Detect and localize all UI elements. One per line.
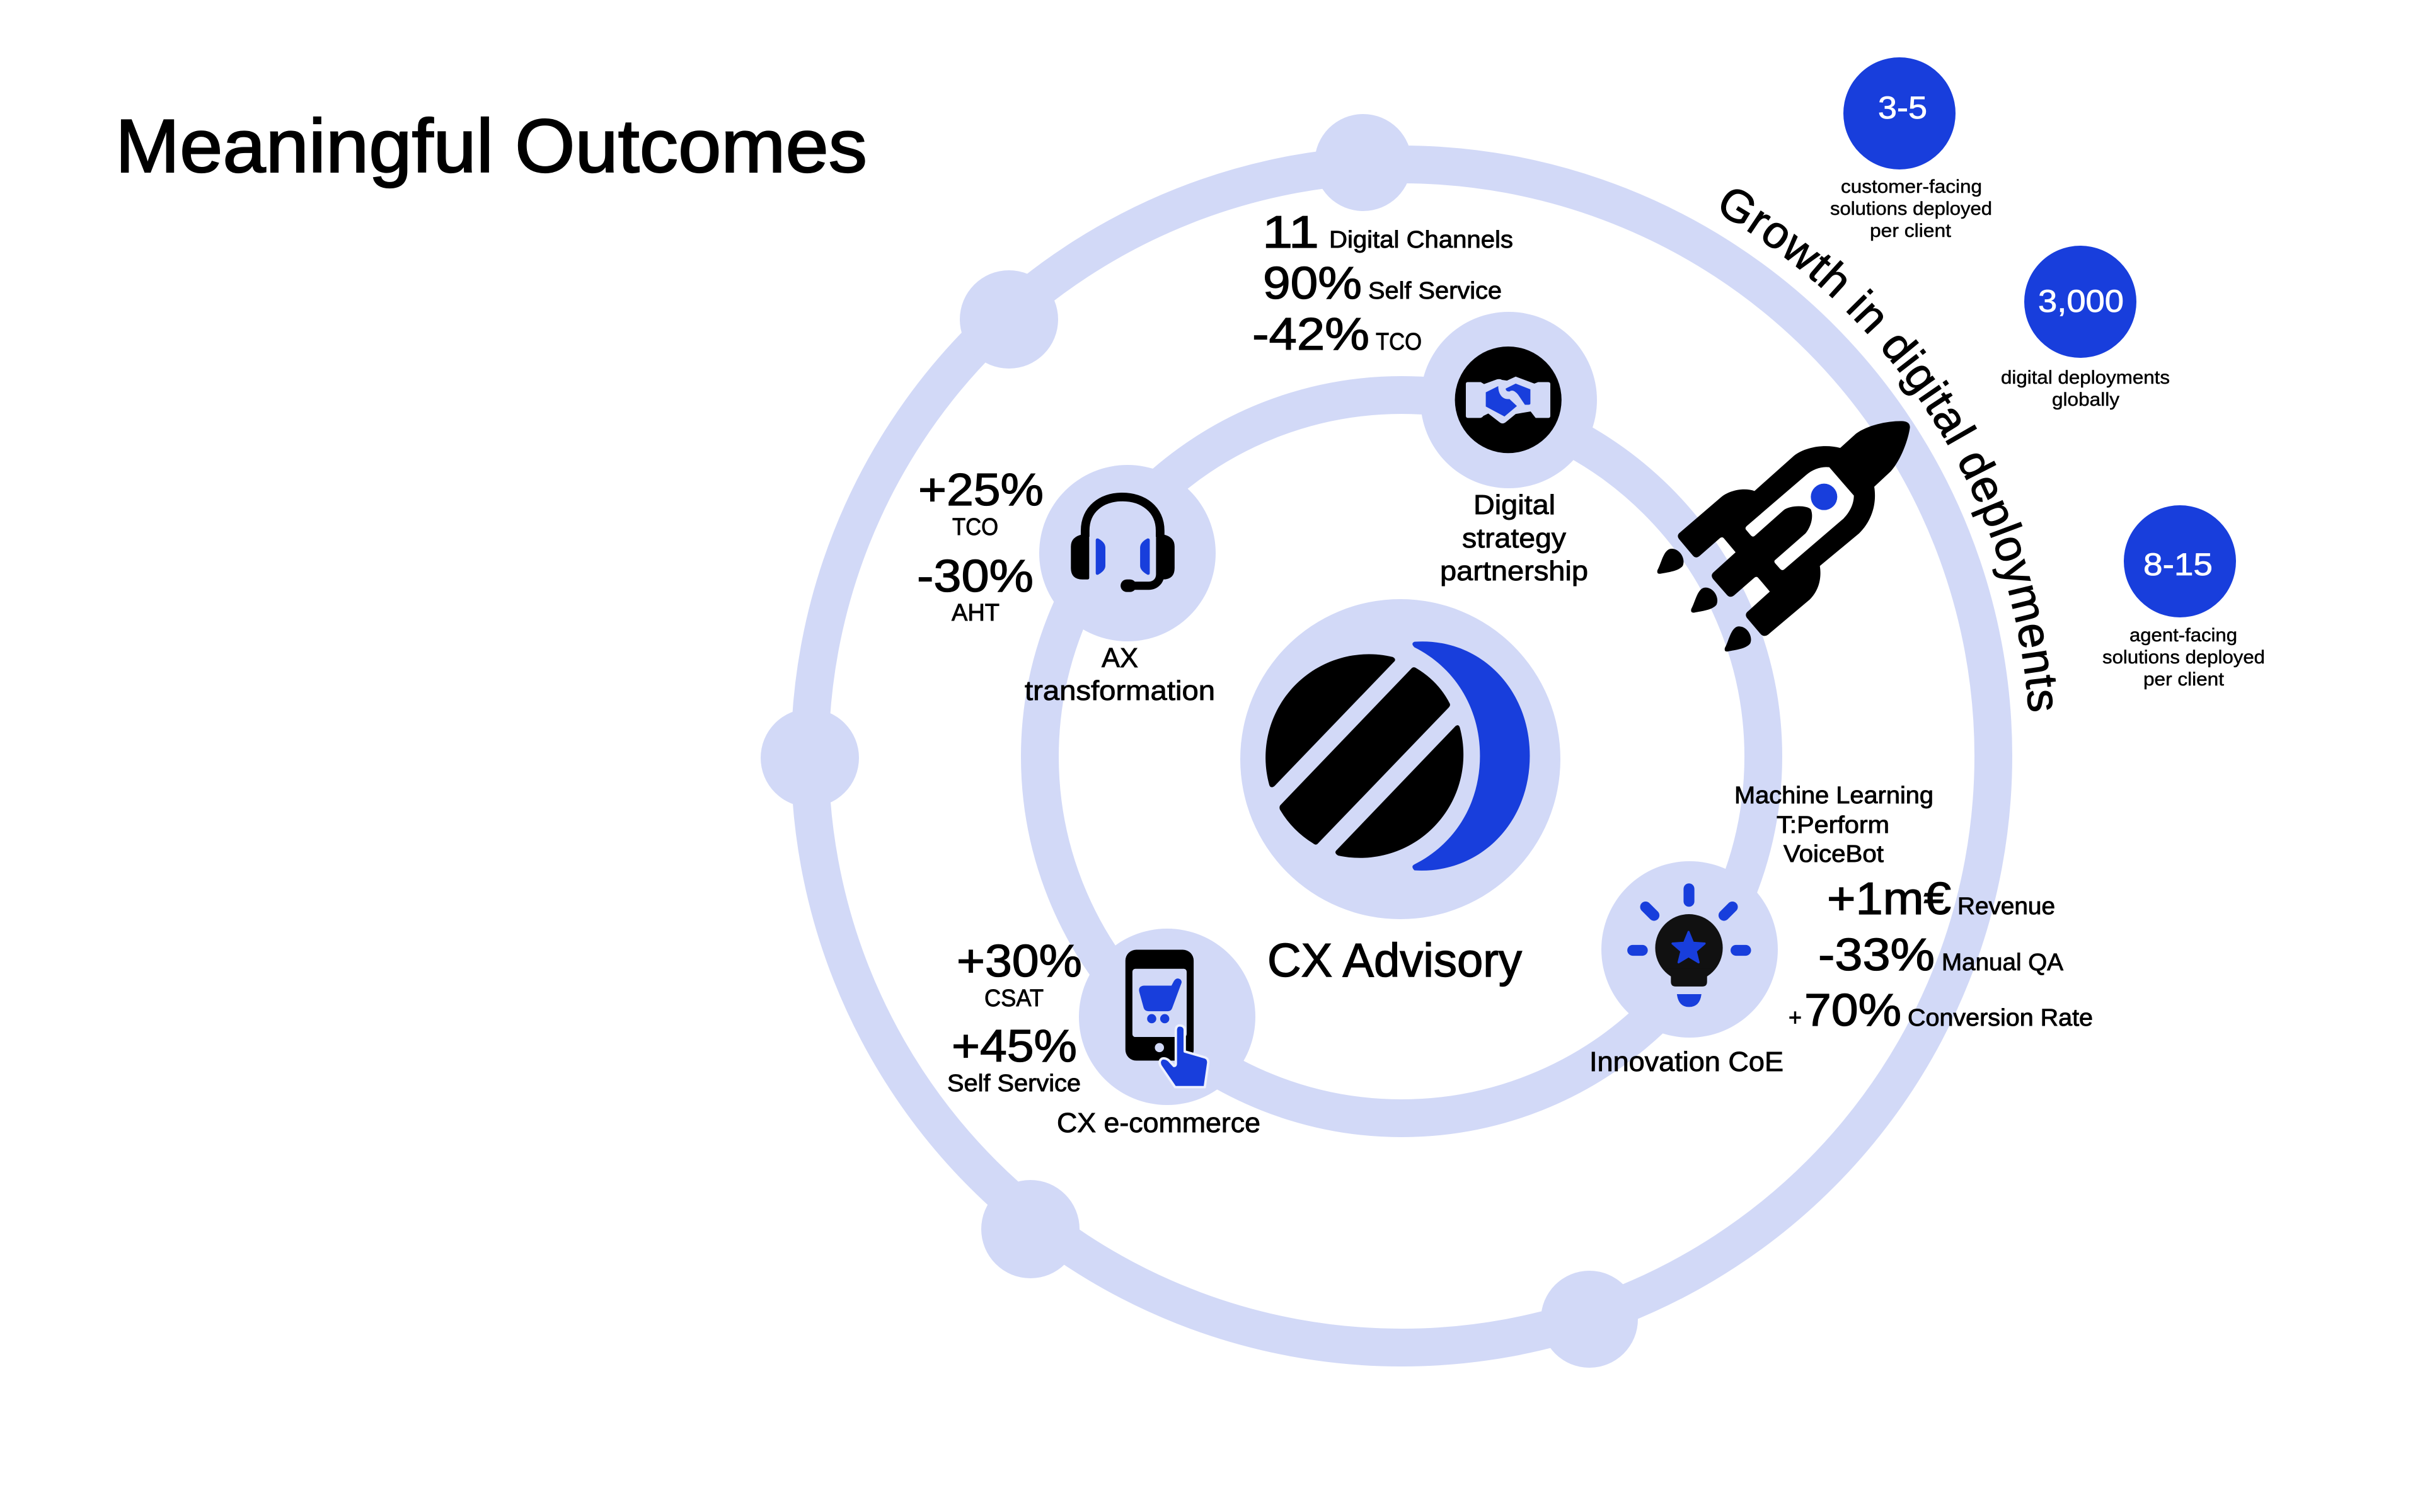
metrics: CX e-commerce: +30% [957,936,1082,987]
stat: 3,000 digital deployments [2001,246,2170,410]
stat: 8-15 agent-facing solutions: agent-facing [2129,625,2237,646]
stat: 3-5 customer-facing solutions: solutions deployed [1830,198,1992,219]
metrics: AX transformation: TCO [952,514,998,541]
stat: 8-15 agent-facing solutions [2102,505,2265,690]
icon: handshake [1455,346,1562,453]
metrics: innovation: + [1789,1005,1802,1031]
metrics: innovation: +1m€ [1827,874,1951,924]
label: digital strategy partnership [1440,490,1588,587]
central label: CX Advisory [1267,934,1522,987]
metrics: innovation: Manual QA [1942,949,2064,976]
list: innovation topics [1734,782,1933,868]
outer orbit ring with nodes [761,114,1993,1368]
icon: phone with cart [1126,950,1208,1087]
label: AX transformation: AX [1102,643,1138,673]
metrics: innovation: 70% [1804,985,1901,1036]
metrics: CX e-commerce: Self Service [947,1070,1081,1097]
metrics: CX e-commerce: CSAT [984,985,1044,1012]
metrics: digital strategy [1252,207,1513,360]
stat: 8-15 agent-facing solutions: per client [2143,669,2225,690]
stat: 8-15 agent-facing solutions: 8-15 [2143,547,2213,582]
metrics: AX transformation: -30% [917,551,1034,602]
stat: 8-15 agent-facing solutions: solutions deployed [2102,647,2265,668]
label: AX transformation [1025,643,1215,706]
metrics: digital strategy: TCO [1376,329,1422,355]
inner orbit ring with nodes [1039,312,1778,1118]
metrics: digital strategy: 11 [1262,207,1319,258]
metrics: digital strategy: Digital Channels [1329,227,1513,253]
metrics: innovation: Conversion Rate [1908,1005,2093,1031]
curved heading: growth in digital deployments: Growth in digital deployments [1721,189,2056,711]
metrics: digital strategy: 90% [1263,258,1362,309]
label: AX transformation: transformation [1025,675,1215,706]
metrics: CX e-commerce [947,936,1082,1097]
metrics: innovation: Revenue [1957,893,2055,920]
stat: 3-5 customer-facing solutions: per client [1870,220,1952,241]
stat: 3-5 customer-facing solutions [1830,57,1992,241]
icon: light bulb [1633,889,1746,1007]
metrics: CX e-commerce: +45% [952,1021,1077,1072]
metrics: digital strategy: Self Service [1368,278,1502,304]
stat: 3-5 customer-facing solutions: customer-facing [1841,176,1982,197]
metrics: innovation: -33% [1818,930,1935,980]
metrics: AX transformation: AHT [952,600,1000,626]
list: innovation topics: VoiceBot [1783,841,1884,868]
label: Innovation CoE: Innovation CoE [1589,1046,1783,1077]
metrics: AX transformation [917,465,1044,626]
metrics: AX transformation: +25% [918,465,1044,515]
label: digital strategy partnership: Digital [1473,490,1555,520]
stat: 3,000 digital deployments: digital deployments [2001,367,2170,388]
title: Meaningful Outcomes [115,104,867,188]
stat: 3-5 customer-facing solutions: 3-5 [1878,90,1927,125]
list: innovation topics: Machine Learning [1734,782,1933,809]
label: digital strategy partnership: strategy [1462,523,1566,554]
metrics: digital strategy: -42% [1252,309,1369,360]
label: digital strategy partnership: partnership [1440,556,1588,587]
icon: headset [1071,497,1175,592]
icon: rocket [1657,421,1910,651]
stat: 3,000 digital deployments: globally [2052,389,2119,410]
central logo [1240,599,1560,919]
metrics: innovation [1789,874,2093,1036]
label: CX e-commerce: CX e-commerce [1057,1108,1260,1138]
stat: 3,000 digital deployments: 3,000 [2038,284,2124,319]
list: innovation topics: T:Perform [1777,812,1889,839]
